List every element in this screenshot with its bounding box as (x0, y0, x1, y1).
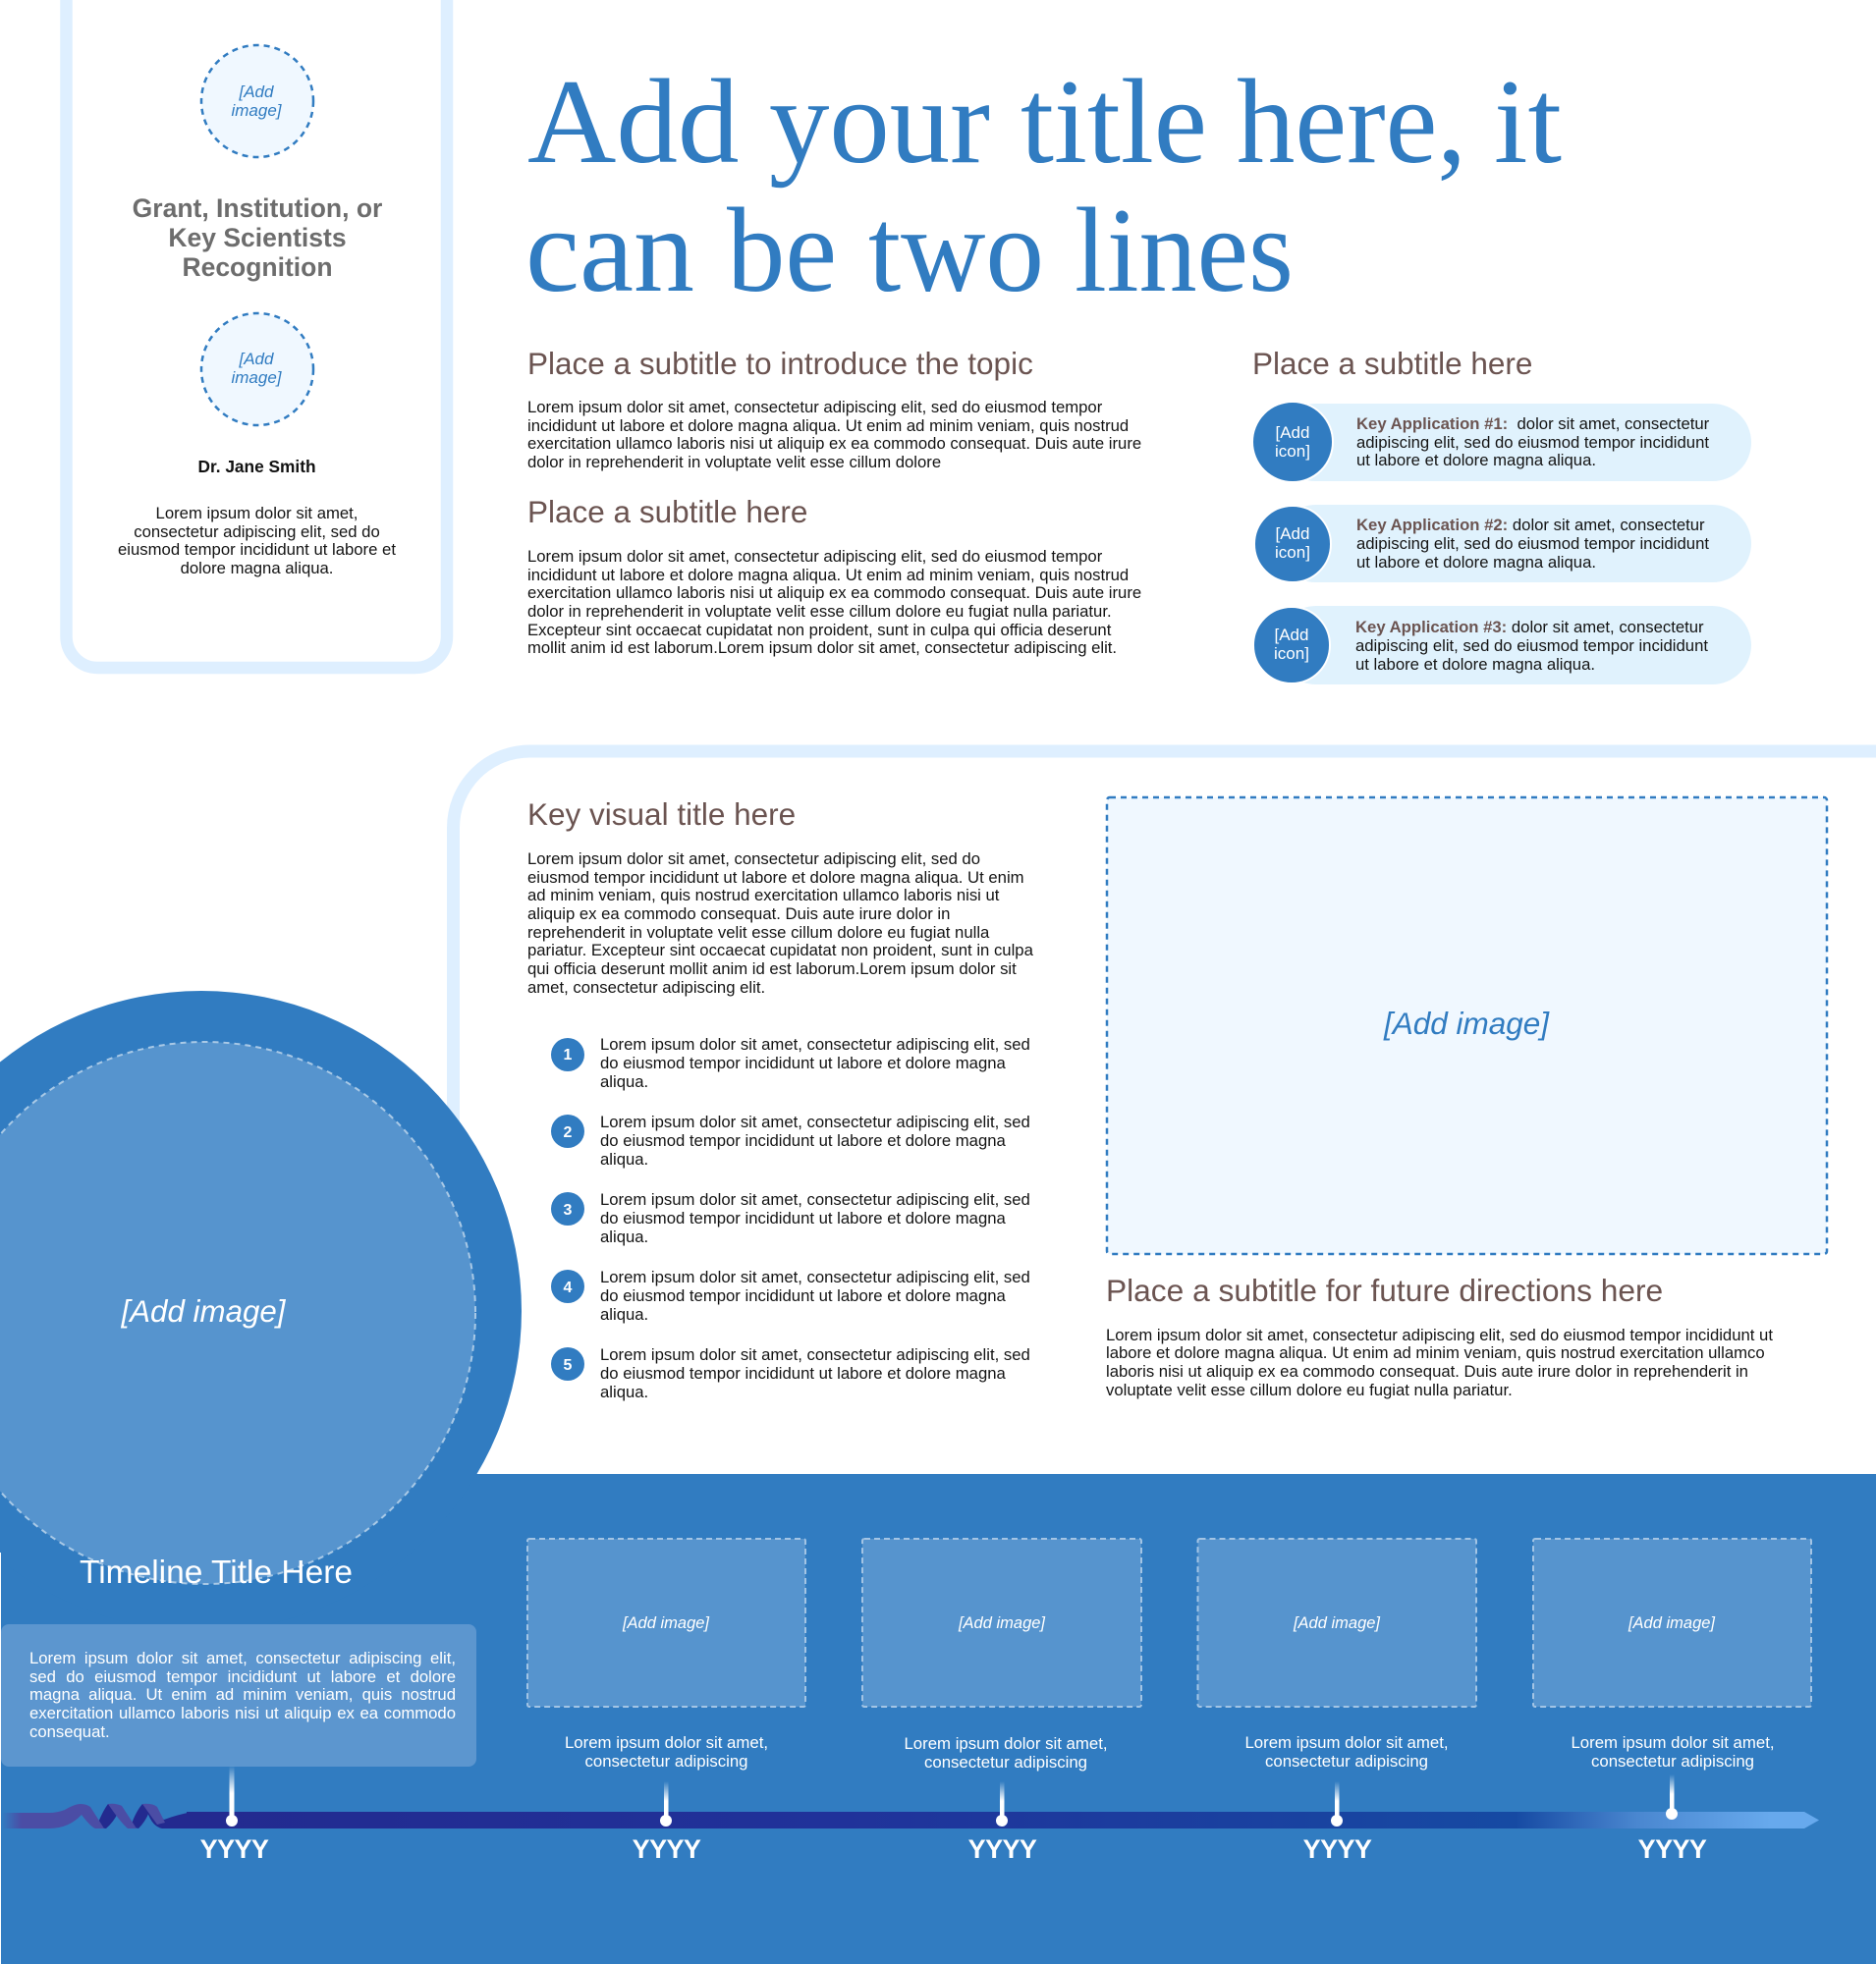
list item 5: Lorem ipsum dolor sit amet, consectetur adipiscing elit, sed (600, 1345, 1030, 1364)
image placeholder: key visual (1107, 797, 1827, 1254)
application pill 3 (1253, 606, 1751, 684)
timeline image 4: [Add image] (1628, 1614, 1715, 1632)
panel: key visual frame (454, 751, 1876, 1277)
timeline image 2: [Add image] (958, 1614, 1045, 1632)
text block: second: dolor in reprehenderit in voluptate velit esse cillum dolore eu fugiat nulla pariatur. (527, 602, 1112, 621)
scientist description: dolore magna aliqua. (181, 559, 333, 577)
list item 4: 4 (564, 1280, 573, 1296)
list item 1: do eiusmod tempor incididunt ut labore et dolore magna (600, 1054, 1007, 1072)
timeline description box: sed do eiusmod tempor incididunt ut labore et dolore (29, 1667, 456, 1686)
list item 3: aliqua. (600, 1228, 648, 1246)
panel: recognition sidebar (67, 0, 447, 668)
timeline image 4 (1533, 1539, 1811, 1707)
numbered list (551, 1035, 1030, 1401)
heading: recognition: Key Scientists (168, 223, 347, 252)
text block: second: Lorem ipsum dolor sit amet, consectetur adipiscing elit, sed do eiusmod tempor (527, 547, 1103, 566)
text block: intro: incididunt ut labore et dolore magna aliqua. Ut enim ad minim veniam, quis nostrud (527, 416, 1129, 435)
milestone 2: YYYY (633, 1834, 701, 1864)
list item 2: 2 (564, 1124, 573, 1141)
text block: key visual: ad minim veniam, quis nostrud exercitation ullamco laboris nisi ut (527, 886, 1000, 904)
text block: second: Excepteur sint occaecat cupidatat non proident, sunt in culpa qui officia deserunt (527, 621, 1112, 639)
list item 5: aliqua. (600, 1383, 648, 1401)
application text 2: ut labore et dolore magna aliqua. (1356, 553, 1596, 572)
image placeholder: top circle: image] (231, 101, 283, 120)
text block: key visual: pariatur. Excepteur sint occaecat cupidatat non proident, sunt in culpa (527, 941, 1034, 959)
image placeholder: scientist portrait: image] (231, 368, 283, 387)
application text 3: adipiscing elit, sed do eiusmod tempor incididunt (1355, 636, 1708, 655)
application pill 2 (1254, 505, 1751, 582)
list item 5: 5 (564, 1357, 573, 1374)
text block: key visual: reprehenderit in voluptate velit esse cillum dolore eu fugiat nulla (527, 923, 990, 942)
list item 1: aliqua. (600, 1072, 648, 1091)
milestone 5 (1638, 1774, 1707, 1864)
text block: future directions: labore et dolore magna aliqua. Ut enim ad minim veniam, quis nostrud exercitation ullamco (1106, 1343, 1765, 1362)
image placeholder: key visual: [Add image] (1383, 1006, 1550, 1041)
scientist description: eiusmod tempor incididunt ut labore et (118, 540, 396, 559)
text block: second: mollit anim id est laborum.Lorem ipsum dolor sit amet, consectetur adipiscing elit. (527, 638, 1117, 657)
milestone 1: YYYY (200, 1834, 269, 1864)
text block: intro: Lorem ipsum dolor sit amet, consectetur adipiscing elit, sed do eiusmod tempor (527, 398, 1103, 416)
image placeholder: scientist portrait: [Add (239, 350, 274, 368)
title (525, 54, 1562, 317)
title: it (1494, 54, 1562, 189)
list item 3: do eiusmod tempor incididunt ut labore et dolore magna (600, 1209, 1007, 1228)
heading: recognition: Grant, Institution, or (133, 193, 382, 223)
caption 1: Lorem ipsum dolor sit amet, (565, 1733, 768, 1752)
application pill 1 (1252, 402, 1751, 482)
application text 1: Key Application #1: dolor sit amet, consectetur (1356, 414, 1709, 433)
caption 3: consectetur adipiscing (1265, 1752, 1428, 1771)
list item 4: do eiusmod tempor incididunt ut labore et dolore magna (600, 1286, 1007, 1305)
list item 4: aliqua. (600, 1305, 648, 1324)
title: two (868, 183, 1044, 317)
list item 3 (551, 1190, 1030, 1246)
timeline description box: magna aliqua. Ut enim ad minim veniam, quis nostrud (29, 1685, 456, 1704)
icon placeholder 3: [Add (1275, 626, 1308, 644)
heading: key visual: Key visual title here (527, 796, 796, 832)
caption 3: Lorem ipsum dolor sit amet, (1244, 1733, 1449, 1752)
text block: intro: dolor in reprehenderit in voluptate velit esse cillum dolore (527, 453, 941, 471)
title: here, (1237, 54, 1466, 189)
image placeholder: scientist portrait (201, 313, 313, 425)
icon placeholder 2: icon] (1275, 543, 1310, 562)
timeline image 1: [Add image] (622, 1614, 709, 1632)
timeline title: Timeline Title Here (80, 1555, 353, 1591)
large circle image placeholder (0, 991, 522, 1631)
text block: key visual: amet, consectetur adipiscing elit. (527, 978, 765, 997)
timeline image 1 (527, 1539, 805, 1707)
title: title (1021, 54, 1207, 189)
subtitle: future directions: Place a subtitle for future directions here (1106, 1273, 1663, 1308)
subtitle: introduce topic: Place a subtitle to introduce the topic (527, 346, 1033, 381)
title: be (727, 183, 837, 317)
list item 1: 1 (564, 1047, 573, 1064)
timeline image 3: [Add image] (1293, 1614, 1380, 1632)
list item 1 (551, 1035, 1030, 1091)
milestone 2 (633, 1781, 701, 1864)
timeline image placeholders (527, 1539, 1811, 1707)
application text 3: Key Application #3: dolor sit amet, consectetur (1355, 618, 1704, 636)
title: your (769, 54, 990, 189)
text block: key visual: aliquip ex ea commodo consequat. Duis aute irure dolor in (527, 904, 950, 923)
caption 4: consectetur adipiscing (1591, 1752, 1754, 1771)
list item 2: Lorem ipsum dolor sit amet, consectetur adipiscing elit, sed (600, 1113, 1030, 1131)
title: lines (1075, 183, 1294, 317)
text block: key visual: eiusmod tempor incididunt ut labore et dolore magna aliqua. Ut enim (527, 868, 1024, 887)
panel: timeline band (0, 1474, 1876, 1964)
list item 5 (551, 1345, 1030, 1401)
text block: key visual: qui officia deserunt mollit anim id est laborum.Lorem ipsum dolor sit (527, 959, 1017, 978)
milestone 3 (968, 1781, 1037, 1864)
subtitle: second: Place a subtitle here (527, 494, 807, 529)
timeline arrow with ribbon (2, 1804, 1819, 1828)
list item 4 (551, 1268, 1030, 1324)
milestone 5: YYYY (1638, 1834, 1707, 1864)
text block: future directions: Lorem ipsum dolor sit amet, consectetur adipiscing elit, sed do eiusmod tempor incididunt ut (1106, 1326, 1773, 1344)
icon placeholder 2 (1254, 506, 1331, 582)
timeline image 3 (1198, 1539, 1476, 1707)
application text 2: Key Application #2: dolor sit amet, consectetur (1356, 516, 1705, 534)
timeline description box (1, 1624, 476, 1767)
application text 2: adipiscing elit, sed do eiusmod tempor incididunt (1356, 534, 1709, 553)
text block: future directions: laboris nisi ut aliquip ex ea commodo consequat. Duis aute irure dolor in reprehenderit in (1106, 1362, 1748, 1381)
application text 1: adipiscing elit, sed do eiusmod tempor incididunt (1356, 433, 1709, 452)
image placeholder: top circle (201, 45, 313, 157)
image placeholder: top circle: [Add (239, 82, 274, 101)
icon placeholder 2: [Add (1276, 524, 1309, 543)
list item 5: do eiusmod tempor incididunt ut labore et dolore magna (600, 1364, 1007, 1383)
title: can (525, 183, 694, 317)
title: Add (527, 54, 739, 189)
heading: recognition: Recognition (182, 252, 333, 282)
timeline captions (565, 1733, 1775, 1772)
milestone 4: YYYY (1303, 1834, 1372, 1864)
large circle image placeholder: [Add image] (120, 1294, 287, 1329)
timeline image 2 (862, 1539, 1141, 1707)
milestone 4 (1303, 1781, 1372, 1864)
text block: second: incididunt ut labore et dolore magna aliqua. Ut enim ad minim veniam, quis nostrud (527, 566, 1129, 584)
caption 2: Lorem ipsum dolor sit amet, (904, 1734, 1108, 1753)
scientist description: consectetur adipiscing elit, sed do (134, 522, 380, 541)
list item 1: Lorem ipsum dolor sit amet, consectetur adipiscing elit, sed (600, 1035, 1030, 1054)
milestone 1 (200, 1766, 269, 1864)
text block: intro: exercitation ullamco laboris nisi ut aliquip ex ea commodo consequat. Duis aute irure (527, 434, 1141, 453)
application text 3: ut labore et dolore magna aliqua. (1355, 655, 1595, 674)
text block: second: exercitation ullamco laboris nisi ut aliquip ex ea commodo consequat. Duis aute irure (527, 583, 1141, 602)
application text 1: ut labore et dolore magna aliqua. (1356, 451, 1596, 469)
list item 3: 3 (564, 1202, 573, 1219)
scientist name: Dr. Jane Smith (197, 457, 316, 476)
caption 1: consectetur adipiscing (584, 1752, 748, 1771)
text block: key visual: Lorem ipsum dolor sit amet, consectetur adipiscing elit, sed do (527, 849, 980, 868)
icon placeholder 1: [Add (1276, 423, 1309, 442)
text block: future directions: voluptate velit esse cillum dolore eu fugiat nulla pariatur. (1106, 1381, 1513, 1399)
list item 2 (551, 1113, 1030, 1169)
timeline description box: consequat. (29, 1722, 110, 1741)
icon placeholder 3: icon] (1274, 644, 1309, 663)
timeline description box: exercitation ullamco laboris nisi ut aliquip ex ea commodo (29, 1704, 456, 1722)
list item 3: Lorem ipsum dolor sit amet, consectetur adipiscing elit, sed (600, 1190, 1030, 1209)
caption 2: consectetur adipiscing (924, 1753, 1087, 1772)
icon placeholder 1: icon] (1275, 442, 1310, 461)
icon placeholder 1 (1252, 402, 1333, 482)
list item 4: Lorem ipsum dolor sit amet, consectetur adipiscing elit, sed (600, 1268, 1030, 1286)
subtitle: applications: Place a subtitle here (1252, 346, 1532, 381)
list item 2: do eiusmod tempor incididunt ut labore et dolore magna (600, 1131, 1007, 1150)
scientist description: Lorem ipsum dolor sit amet, (156, 504, 358, 522)
icon placeholder 3 (1253, 607, 1330, 683)
list item 2: aliqua. (600, 1150, 648, 1169)
caption 4: Lorem ipsum dolor sit amet, (1571, 1733, 1775, 1752)
milestone 3: YYYY (968, 1834, 1037, 1864)
